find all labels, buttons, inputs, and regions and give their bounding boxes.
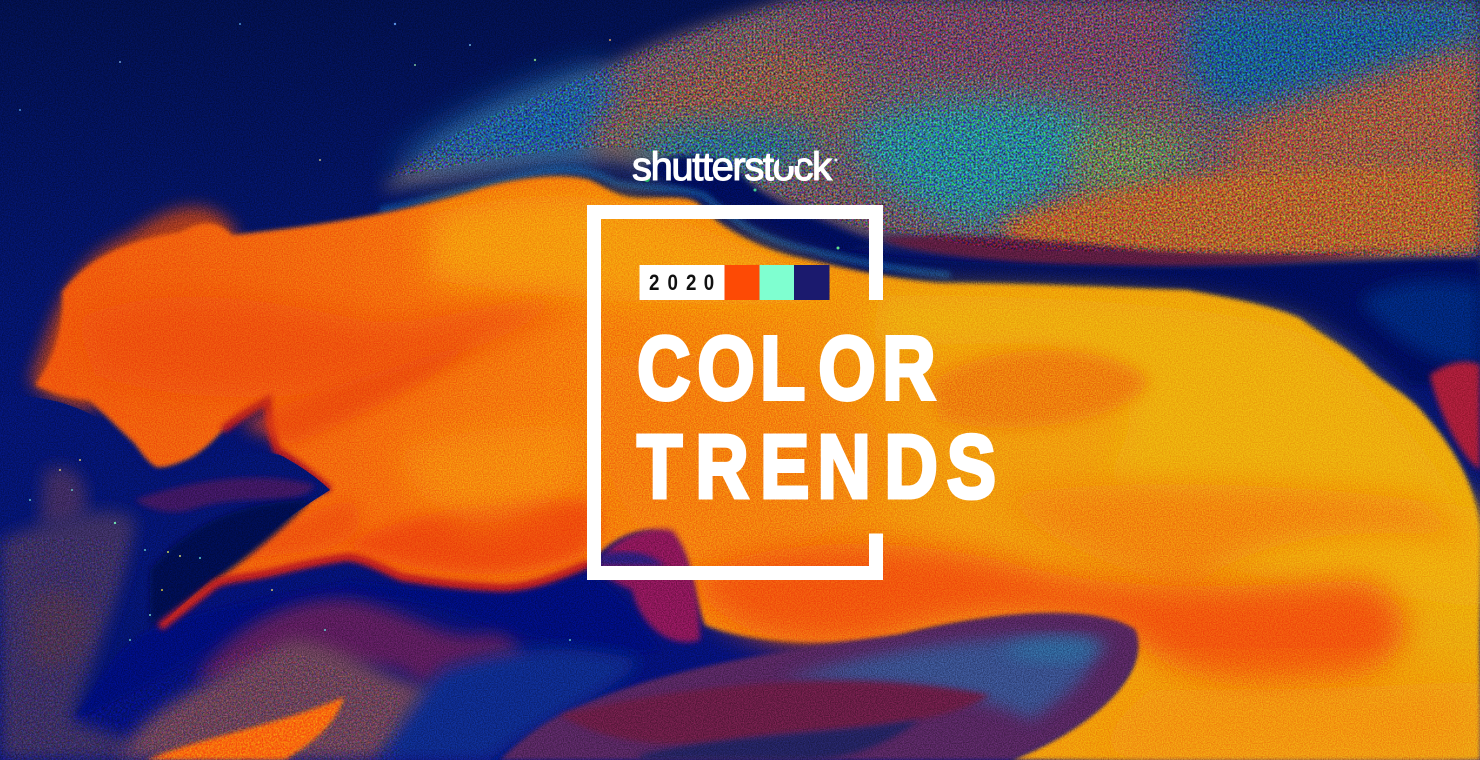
dark notch under logo xyxy=(645,156,880,262)
teal centre xyxy=(850,100,1101,225)
glitter specks xyxy=(19,23,840,641)
yellow right field xyxy=(870,295,1480,610)
dark red streak xyxy=(880,236,1400,267)
grey brown speckled haze xyxy=(120,640,440,760)
year label xyxy=(640,265,724,300)
brown right xyxy=(1220,50,1480,190)
amber top of frame xyxy=(430,196,870,305)
centre orange xyxy=(598,353,883,560)
main orange paint body xyxy=(35,176,1480,760)
purple brown top xyxy=(800,0,1290,86)
crimson crack in left lobe xyxy=(223,400,330,490)
band colour speckle xyxy=(386,0,1480,258)
lower left masses xyxy=(0,395,660,760)
shutterstock logo: shutterstock xyxy=(632,145,833,189)
title: TRENDS: TRENDS xyxy=(637,418,996,517)
amber highlight low centre xyxy=(400,426,585,525)
right edge crimson xyxy=(1430,362,1480,470)
swatch: navy xyxy=(794,265,830,300)
left glow behind paint xyxy=(30,208,240,410)
year label: 2020 xyxy=(649,272,714,295)
navy patch inside frame corner xyxy=(601,552,665,566)
white square frame xyxy=(587,205,883,580)
maroon blob at frame corner xyxy=(601,529,700,642)
dark strip between band and paint xyxy=(800,245,1480,385)
red-orange left streak xyxy=(75,285,590,397)
swatch: orange xyxy=(724,265,760,300)
blue right lagoon xyxy=(1360,281,1480,365)
swatch: mint xyxy=(760,265,794,300)
foreground artwork xyxy=(587,150,995,580)
maroon lower mass xyxy=(195,600,526,703)
tonal overlays on paint xyxy=(75,196,883,574)
blue lower mass xyxy=(380,649,640,760)
bottom left orange flame xyxy=(147,697,344,760)
orange brown lower right xyxy=(1000,164,1480,259)
purple swirl xyxy=(500,614,1138,760)
olive transition xyxy=(1070,126,1200,201)
brown diagonal xyxy=(590,40,852,161)
lower red-orange glow xyxy=(340,499,601,574)
year and palette badge xyxy=(640,265,830,300)
navy channel xyxy=(76,575,660,717)
orange mid swells xyxy=(690,350,1480,760)
blue left wing of band xyxy=(390,65,618,170)
lower left speckle xyxy=(0,535,400,760)
blue top right xyxy=(1184,0,1480,115)
title: COLOR: COLOR xyxy=(637,319,936,419)
upper right mottled band xyxy=(380,0,1480,267)
blue rim above paint xyxy=(380,170,950,275)
crimson lip along lower paint edge xyxy=(160,557,589,627)
logo trademark dot xyxy=(834,158,838,162)
